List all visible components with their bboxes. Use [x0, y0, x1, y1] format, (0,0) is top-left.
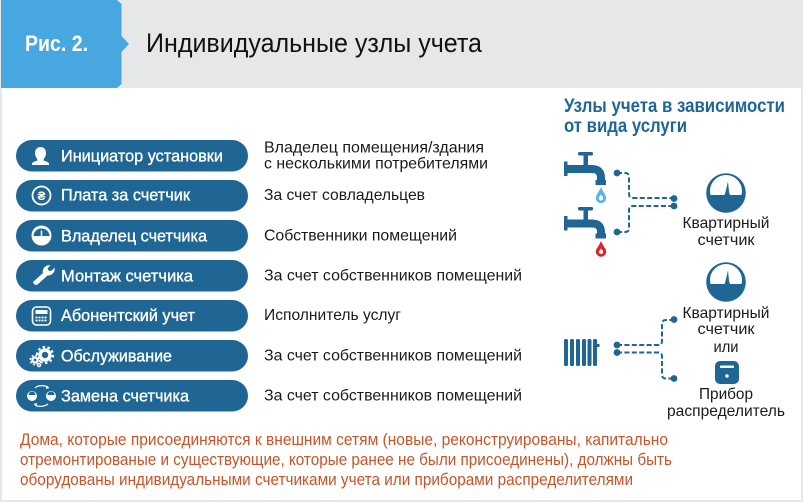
row: maintenance: Обслуживание — [61, 346, 172, 366]
row: initiator — [16, 140, 248, 172]
row: initiator: Инициатор установки — [61, 146, 223, 166]
header tab: figure number: Рис. 2. — [25, 31, 88, 56]
row: maintenance — [16, 340, 248, 372]
icon: calculator — [32, 307, 50, 325]
label: apartment meter 1: счетчик — [698, 232, 756, 249]
icon: person — [32, 147, 49, 165]
icon: coin — [32, 186, 50, 204]
icon: cold water tap — [564, 152, 606, 203]
row: owner — [16, 220, 248, 252]
footnote: отремонтированые и существующие, которые ранее не были присоединены), должны быть — [20, 450, 672, 469]
icon: apartment meter 2 — [706, 262, 746, 302]
icon: swap gauges — [27, 386, 56, 406]
row: replacement: Замена счетчика — [61, 386, 190, 406]
icon: apartment meter 1 — [706, 173, 746, 213]
row: replacement — [16, 380, 248, 412]
drop: blue — [596, 187, 606, 203]
value: maintenance: За счет собственников помещений — [264, 348, 522, 364]
row: owner: Владелец счетчика — [61, 226, 208, 246]
label: apartment meter 2 or: Квартирный — [682, 305, 770, 322]
footnote: Дома, которые присоединяются к внешним сетям (новые, реконструированы, капитально — [20, 430, 668, 449]
row: subscriber accounting: Абонентский учет — [61, 306, 195, 325]
value: initiator: Владелец помещения/здания — [264, 140, 484, 156]
footnote: оборудованы индивидуальными счетчиками учета или приборами распределителями — [20, 470, 633, 489]
icon: wrench — [33, 265, 55, 285]
title: Индивидуальные узлы учета — [146, 28, 483, 58]
row: installation: Монтаж счетчика — [61, 266, 194, 286]
label: apartment meter 1: Квартирный — [682, 215, 770, 232]
row: subscriber accounting — [16, 300, 248, 332]
label: distributor: Прибор — [699, 386, 753, 403]
header tab: figure number — [1, 0, 129, 88]
value: fee: За счет совладельцев — [264, 187, 425, 204]
value: initiator: с несколькими потребителями — [264, 156, 488, 172]
icon: distributor — [715, 361, 739, 384]
row: installation — [16, 260, 248, 292]
row: fee — [16, 180, 248, 212]
icon: radiator — [564, 339, 600, 366]
value: installation: За счет собственников помещений — [264, 268, 522, 284]
icon: gauge — [32, 226, 52, 246]
value: accounting: Исполнитель услуг — [264, 307, 401, 324]
row: fee: Плата за счетчик — [61, 186, 191, 204]
row values — [264, 140, 522, 404]
value: replacement: За счет собственников помещений — [264, 388, 522, 404]
value: owner: Собственники помещений — [264, 228, 457, 244]
label: distributor: распределитель — [667, 403, 785, 420]
connector: radiator to devices — [614, 316, 677, 382]
icon: coin: ₴ — [37, 189, 46, 203]
right panel heading: от вида услуги — [564, 116, 687, 137]
label: apartment meter 2 or: или — [714, 339, 738, 356]
icon: gears — [30, 347, 53, 366]
label: apartment meter 2 or: счетчик — [698, 321, 756, 338]
drop: red — [596, 241, 606, 257]
connector: taps to meter — [614, 170, 677, 235]
icon: hot water tap — [564, 207, 606, 257]
